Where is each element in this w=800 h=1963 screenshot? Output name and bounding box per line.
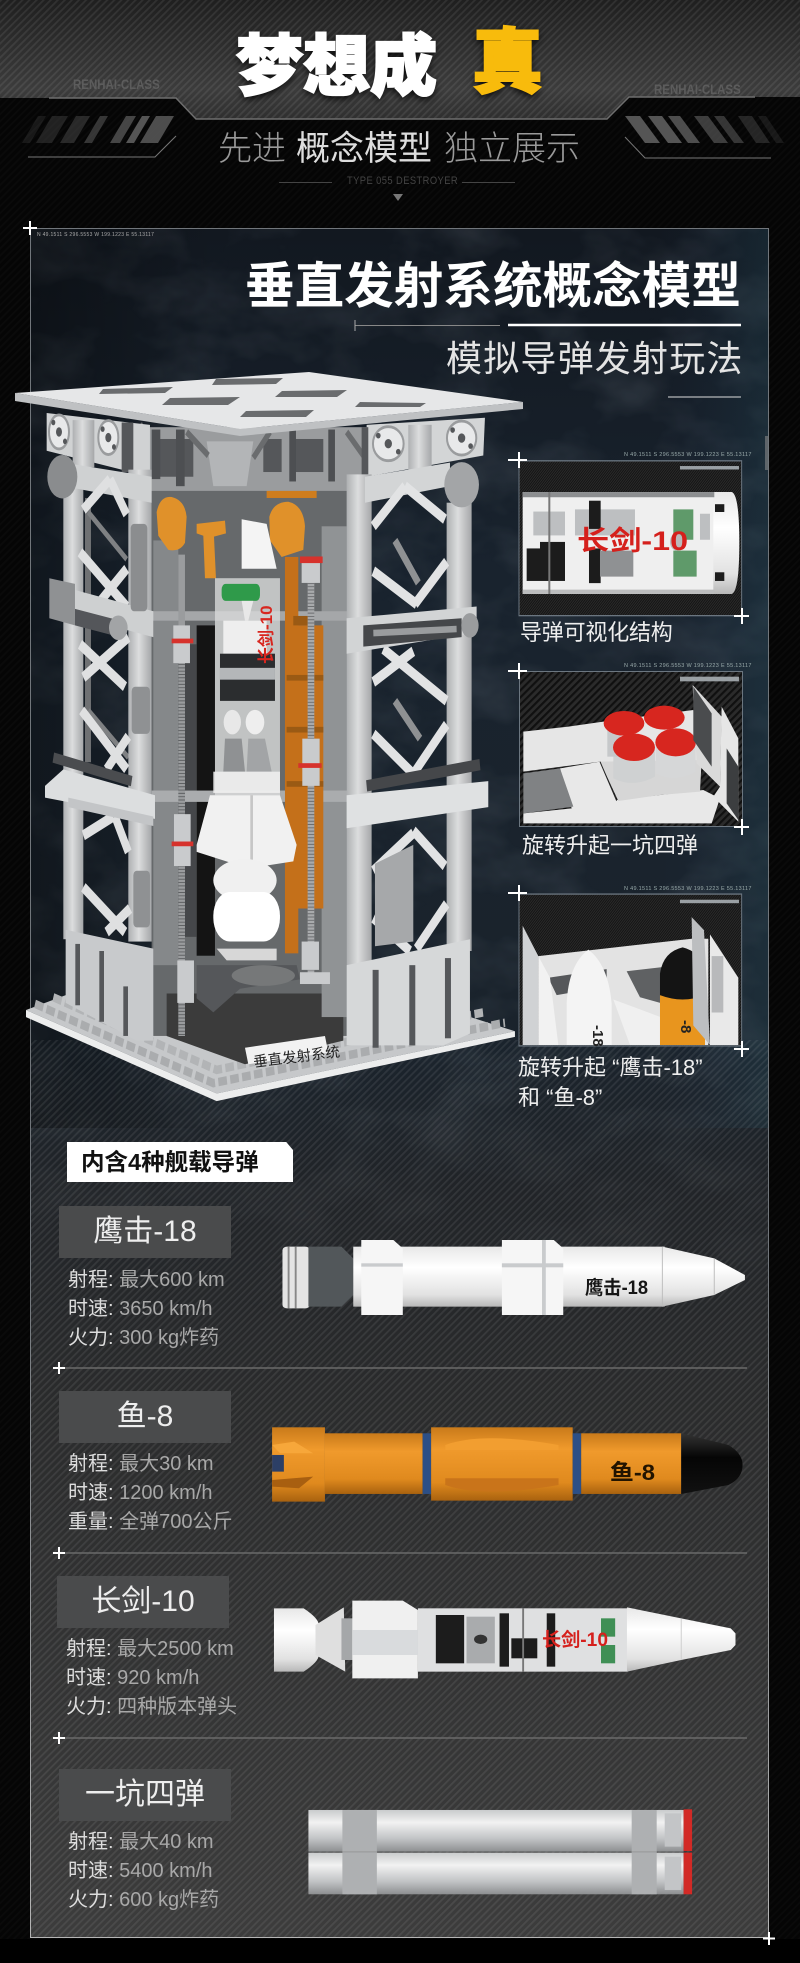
header stripes left [22, 116, 174, 143]
spec lines: 火力: 300 kg炸药 [68, 1327, 219, 1349]
slab [15, 372, 523, 436]
missile 3 specs: Changjian-10 [57, 1576, 237, 1718]
spec lines: 时速: 920 km/h [66, 1667, 199, 1689]
illustration: Changjian-10 missile: 长剑-10 [542, 1628, 608, 1651]
spec lines: 射程: 最大2500 km [66, 1638, 234, 1660]
illustration: Yu-8 missile: 鱼-8 [610, 1460, 655, 1485]
detail panel 3: rising missiles: N 49.1511 S 296.5553 W 199.1223 E 55.13117 [624, 886, 752, 892]
detail caption 3: 和 “鱼-8” [518, 1085, 602, 1110]
label: RENHAI-CLASS right: RENHAI-CLASS [654, 81, 741, 97]
spec lines [66, 1638, 237, 1718]
illustration: Yingji-18 missile: 鹰击-18 [585, 1276, 648, 1299]
name tag: 鹰击-18 [93, 1215, 197, 1248]
subtitle [218, 130, 580, 168]
heading: subtitle: 模拟导弹发射玩法 [446, 338, 744, 379]
spec lines: 射程: 最大30 km [68, 1453, 214, 1475]
missile in bay [197, 519, 297, 960]
detail panel 1: missile visible structure: N 49.1511 S 296.5553 W 199.1223 E 55.13117 [624, 452, 752, 458]
top frieze [47, 413, 485, 491]
header bracket lines [28, 136, 771, 158]
spec lines [68, 1831, 219, 1911]
threaded rods [172, 555, 330, 1036]
missile 1 specs: Yingji-18 [59, 1206, 231, 1349]
left frame [45, 455, 155, 1041]
spec lines [68, 1453, 232, 1533]
heading: main title: 垂直发射系统概念模型 [245, 258, 741, 314]
detail caption 3: 旋转升起 “鹰击-18” [518, 1055, 703, 1080]
spec lines: 射程: 最大600 km [68, 1269, 225, 1291]
detail caption 2: 旋转升起一坑四弹 [522, 833, 698, 858]
subtitle: 独立展示 [444, 130, 580, 168]
name tag: 长剑-10 [91, 1585, 195, 1618]
heading tag: includes four missiles [67, 1142, 293, 1182]
name tag [59, 1769, 231, 1821]
heading tag: includes four missiles: 内含4种舰载导弹 [81, 1149, 259, 1175]
illustration: vertical launch tower: 长剑-10 [256, 605, 276, 664]
baseplate [26, 970, 515, 1101]
label plate [245, 1036, 328, 1064]
name tag: 一坑四弹 [85, 1778, 205, 1811]
name tag: 鱼-8 [117, 1400, 173, 1433]
name tag [57, 1576, 229, 1628]
detail panel 3: rising missiles: -18 [589, 1025, 606, 1047]
spec lines: 时速: 3650 km/h [68, 1298, 213, 1320]
missile 4 specs: four-pack [59, 1769, 231, 1911]
header stripes right [625, 116, 784, 143]
orange fittings [157, 497, 305, 578]
orange rack [285, 557, 323, 953]
detail panel 3: rising missiles: -8 [677, 1020, 694, 1033]
title underline [354, 320, 741, 398]
detail caption 3 [518, 1055, 703, 1110]
detail caption 1: 导弹可视化结构 [520, 620, 673, 645]
spec lines: 时速: 5400 km/h [68, 1860, 213, 1882]
title: 真 [472, 24, 543, 103]
spec lines: 火力: 四种版本弹头 [66, 1696, 237, 1718]
label: TYPE 055 DESTROYER [279, 175, 515, 201]
spec lines: 火力: 600 kg炸药 [68, 1889, 219, 1911]
illustration: vertical launch tower: 垂直发射系统 [252, 1043, 341, 1071]
label: TYPE 055 DESTROYER: TYPE 055 DESTROYER [347, 175, 458, 187]
panel corner mark and coordinates: N 49.1511 S 296.5553 W 199.1223 E 55.13117 [37, 232, 154, 238]
central bay [152, 474, 348, 1064]
spec lines: 重量: 全弹700公斤 [68, 1511, 232, 1533]
right frame [347, 462, 488, 1048]
subtitle: 概念模型 [296, 130, 432, 168]
spec lines [68, 1269, 225, 1349]
detail panel 1: missile visible structure: 长剑-10 [577, 526, 688, 556]
subtitle: 先进 [218, 130, 286, 168]
label: RENHAI-CLASS left: RENHAI-CLASS [73, 76, 160, 92]
spec lines: 时速: 1200 km/h [68, 1482, 213, 1504]
spec lines: 射程: 最大40 km [68, 1831, 214, 1853]
title: 梦想成 [236, 30, 437, 105]
name tag [59, 1206, 231, 1258]
detail panel 2: four-pack missile cells: N 49.1511 S 296.5553 W 199.1223 E 55.13117 [624, 663, 752, 669]
name tag [59, 1391, 231, 1443]
title [235, 24, 544, 105]
missile 2 specs: Yu-8 [59, 1391, 232, 1533]
